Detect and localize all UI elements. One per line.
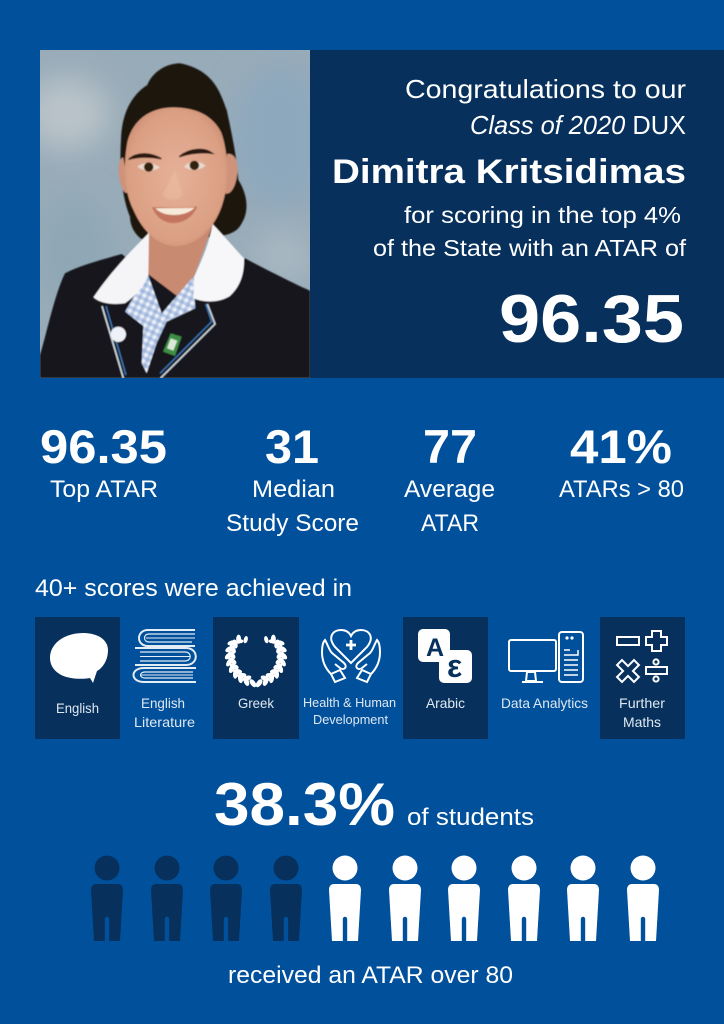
icon: translation letters: ε	[447, 648, 462, 684]
icon: hands holding heart	[322, 630, 380, 682]
stat: median study score: 31	[265, 420, 319, 473]
stat: average ATAR	[404, 420, 495, 537]
green badge	[163, 333, 182, 356]
icon: speech bubble	[50, 633, 108, 683]
icon: translation letters	[418, 629, 472, 684]
subject: Health and Human Development: Development	[313, 713, 388, 727]
subject: Greek	[213, 617, 299, 739]
lapel piping	[102, 306, 123, 378]
subject: Data Analytics: Data Analytics	[501, 695, 588, 711]
subject: Data Analytics	[501, 632, 588, 711]
stat: top ATAR: 96.35	[40, 420, 167, 473]
nose	[164, 182, 182, 200]
header panel	[310, 50, 724, 378]
stat: ATARs over 80: ATARs > 80	[559, 476, 684, 503]
heading: class of 2020 DUX: Class of 2020 DUX	[470, 110, 686, 140]
icon: desktop computer	[509, 632, 583, 682]
brows	[129, 149, 212, 159]
statistic: 38.3 percent of students	[214, 771, 534, 838]
subheading: 40+ scores: 40+ scores were achieved in	[35, 575, 352, 602]
hair	[120, 63, 246, 242]
stat: top ATAR	[40, 420, 167, 503]
statistic: 38.3 percent of students: 38.3%	[214, 771, 395, 838]
student photo	[40, 50, 310, 378]
ATAR score: 96.35	[499, 281, 684, 357]
student name: Dimitra Kritsidimas	[332, 153, 686, 191]
stat: median study score	[226, 420, 359, 537]
stat: ATARs over 80	[559, 420, 684, 503]
caption: received an ATAR over 80: received an ATAR over 80	[228, 962, 513, 989]
collar left	[93, 233, 149, 304]
mouth	[152, 207, 197, 223]
subject: Further Maths	[600, 617, 685, 739]
eyes	[137, 162, 206, 171]
heading: congratulations: Congratulations to our	[405, 74, 686, 104]
subject: English Literature: Literature	[134, 714, 195, 730]
stat: median study score: Median	[252, 476, 335, 503]
stat: average ATAR: 77	[423, 420, 477, 473]
blazer	[40, 254, 310, 378]
icon: laurel wreath	[223, 630, 289, 689]
face	[125, 107, 227, 246]
stat: ATARs over 80: 41%	[570, 420, 672, 473]
subject: Greek: Greek	[238, 695, 275, 711]
stat: average ATAR: Average	[404, 476, 495, 503]
shirt	[125, 273, 195, 373]
subject: Health and Human Development: Health & Human	[303, 696, 396, 710]
statistic: 38.3 percent of students: of students	[407, 804, 534, 831]
text: top 4 percent: for scoring in the top 4%	[404, 202, 681, 228]
icon: translation letters: A	[426, 634, 444, 662]
subject: English Literature	[134, 630, 196, 730]
subject: Arabic: Arabic	[426, 695, 465, 711]
collar right	[193, 224, 244, 302]
stat: average ATAR: ATAR	[421, 510, 479, 537]
subject: Further Maths: Maths	[623, 714, 661, 730]
subject: Arabic	[403, 617, 488, 739]
neck	[148, 224, 214, 296]
stat: median study score: Study Score	[226, 510, 359, 537]
subject: Health and Human Development	[303, 630, 396, 727]
icon: stacked books	[134, 630, 196, 682]
icon: maths operators	[611, 631, 667, 688]
text: state ATAR: of the State with an ATAR of	[373, 235, 687, 261]
subject: English	[35, 617, 120, 739]
stat: top ATAR: Top ATAR	[50, 476, 158, 503]
white pin	[111, 327, 126, 342]
subject: English: English	[56, 700, 99, 716]
subject: English Literature: English	[141, 695, 185, 711]
ears	[119, 157, 129, 193]
pictogram: ten people, four dark	[91, 856, 659, 941]
subject: Further Maths: Further	[619, 695, 665, 711]
